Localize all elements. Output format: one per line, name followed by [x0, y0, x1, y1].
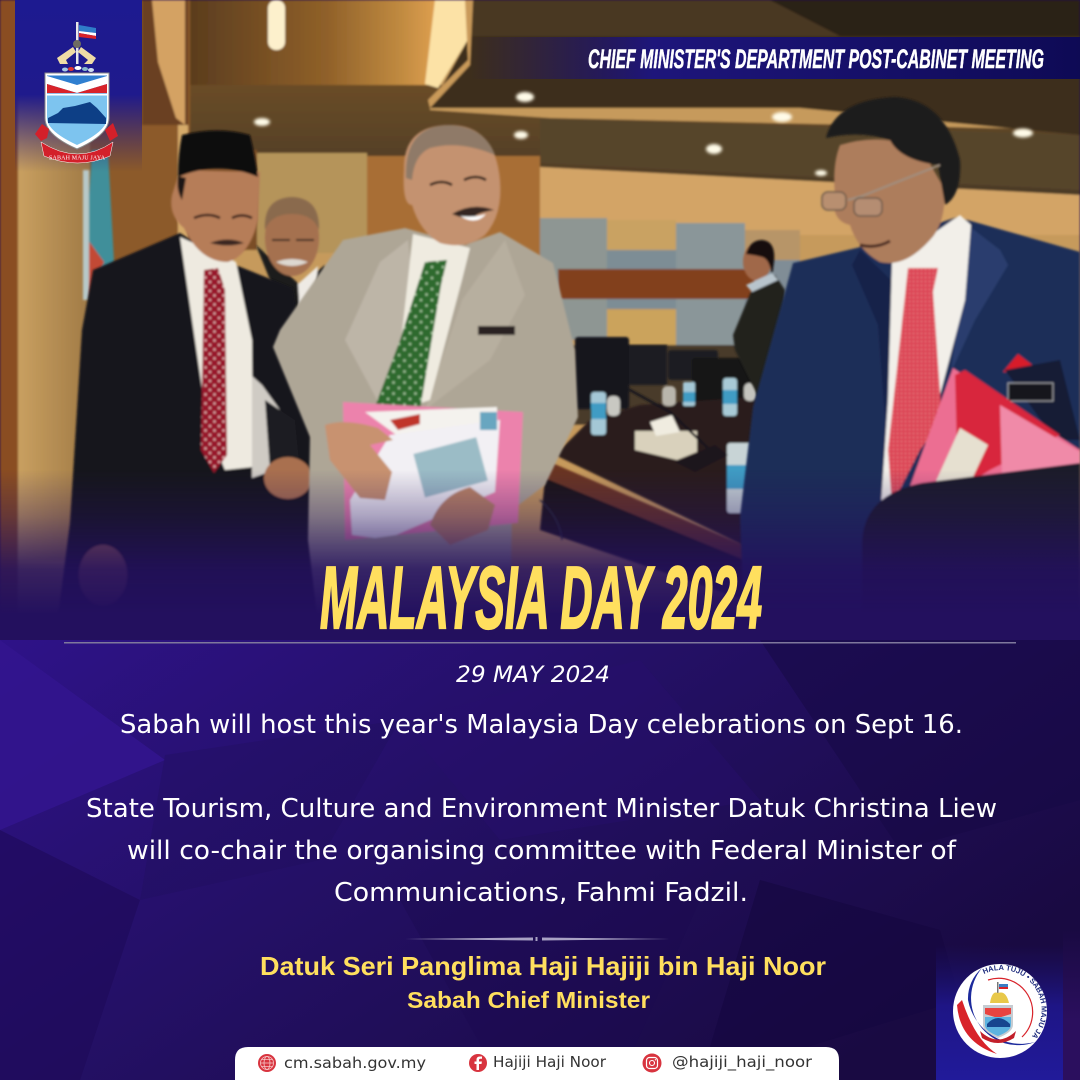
- person: left minister in black suit and songkok: [55, 130, 330, 640]
- Sabah state crest: [35, 22, 118, 163]
- pocket square and badge: [1003, 354, 1080, 440]
- bottom purple panel: [0, 640, 1080, 1080]
- bottom purple fade: [0, 470, 1080, 650]
- crest scroll with motto: [35, 123, 118, 163]
- crest scroll with motto: SABAH MAJU JAYA: [49, 156, 106, 162]
- person: older man behind: [256, 197, 325, 330]
- person: right minister in navy suit, red tie: [740, 97, 1080, 640]
- blue corner panel behind campaign logo: [936, 930, 1080, 1080]
- body text: State Tourism, Culture and Environment Minister Datuk Christina Liew: [86, 794, 997, 824]
- Hala Tuju logo: HALA TUJU • SABAH MAJU JAYA: [982, 964, 1047, 1038]
- name badge: [478, 326, 515, 335]
- person in background right: [733, 240, 785, 400]
- ceiling lights: [254, 92, 1033, 176]
- small crest scroll: [980, 1031, 1016, 1043]
- crest shield: [45, 73, 109, 149]
- divider line: [64, 642, 1016, 644]
- pink folder: [890, 368, 1080, 505]
- body text: Communications, Fahmi Fadzil.: [334, 878, 748, 908]
- body text: Sabah will host this year's Malaysia Day celebrations on Sept 16.: [120, 710, 963, 740]
- photo background: meeting room: [0, 0, 1080, 680]
- attribution: Sabah Chief Minister: [407, 987, 650, 1013]
- small crest flag: [997, 982, 1008, 1002]
- icon: facebook: [469, 1054, 487, 1072]
- blue panel behind crest: [15, 0, 142, 172]
- person: Chief Minister in beige suit, green tie: [273, 125, 578, 640]
- contact bar: [235, 1047, 839, 1080]
- facebook name: Hajiji Haji Noor: [493, 1053, 607, 1071]
- icon: instagram: [642, 1054, 662, 1072]
- attribution: [260, 951, 826, 1013]
- flag behind: [83, 150, 114, 300]
- small crest arms: [990, 992, 1009, 1003]
- carried notebooks: [252, 376, 300, 478]
- website: cm.sabah.gov.my: [284, 1054, 426, 1072]
- attribution: Datuk Seri Panglima Haji Hajiji bin Haji Noor: [260, 951, 826, 981]
- armchair: [862, 463, 1080, 640]
- header band: [470, 37, 1080, 79]
- instagram handle: @hajiji_haji_noor: [672, 1053, 813, 1072]
- crest arms: [57, 47, 96, 64]
- small ornament divider: [405, 937, 670, 941]
- conference table and chairs: [540, 337, 780, 600]
- body text: [86, 710, 997, 908]
- body text: will co-chair the organising committee with Federal Minister of: [127, 836, 957, 866]
- date: 29 MAY 2024: [456, 663, 610, 688]
- crest flag: [76, 22, 96, 64]
- icon: globe: [258, 1054, 276, 1072]
- held documents: [343, 402, 523, 540]
- small crest shield: [983, 1005, 1013, 1038]
